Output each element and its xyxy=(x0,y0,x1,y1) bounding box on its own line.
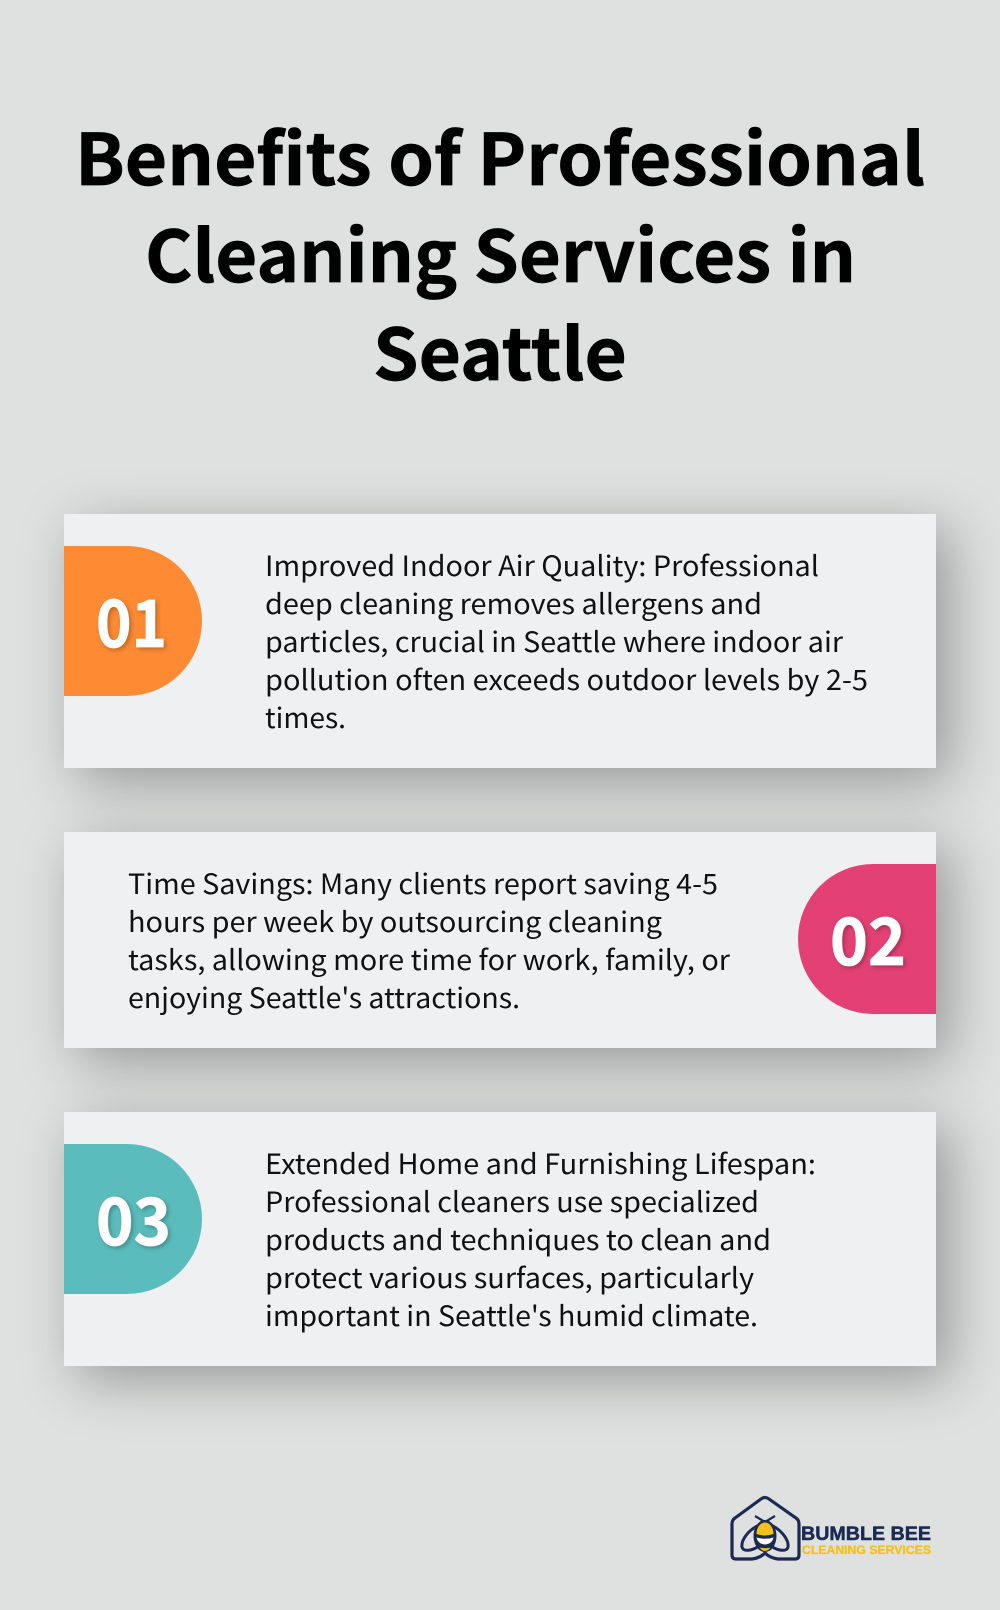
card background 3 xyxy=(64,1112,936,1366)
title: Benefits of Professional xyxy=(75,104,925,206)
text block 2: Time Savings: Many clients report saving 4-5 xyxy=(128,863,718,903)
text block 2: enjoying Seattle's attractions. xyxy=(128,977,520,1017)
number badge 02 xyxy=(798,864,936,1014)
text block 3: products and techniques to clean and xyxy=(265,1219,771,1259)
panel: time savings xyxy=(64,832,936,1048)
title: Cleaning Services in xyxy=(145,201,856,303)
icon: house with bee xyxy=(732,1498,799,1559)
logo: Bumble Bee Cleaning Services xyxy=(732,1498,931,1559)
number badge 03 xyxy=(64,1144,202,1294)
text block 1: times. xyxy=(265,697,346,737)
number 01: 01 xyxy=(96,572,167,666)
text block 2 xyxy=(128,863,730,1017)
logo tagline: CLEANING SERVICES xyxy=(802,1543,931,1557)
title: Seattle xyxy=(373,299,627,401)
text block 2: hours per week by outsourcing cleaning xyxy=(128,901,662,941)
text block 1: deep cleaning removes allergens and xyxy=(265,583,762,623)
logo wordmark: BUMBLE BEE xyxy=(801,1524,931,1545)
text block 2: tasks, allowing more time for work, family, or xyxy=(128,939,730,979)
panel: improved indoor air quality xyxy=(64,514,936,768)
text block 1: particles, crucial in Seattle where indoor air xyxy=(265,621,843,661)
number 02: 02 xyxy=(830,890,906,984)
text block 1: Improved Indoor Air Quality: Professional xyxy=(265,545,819,585)
card background 2 xyxy=(64,832,936,1048)
text block 3: Professional cleaners use specialized xyxy=(265,1181,759,1221)
text block 1 xyxy=(265,545,868,737)
text block 1: pollution often exceeds outdoor levels by 2-5 xyxy=(265,659,868,699)
title xyxy=(75,104,925,401)
number 03: 03 xyxy=(96,1170,171,1264)
card background 1 xyxy=(64,514,936,768)
panel: extended lifespan xyxy=(64,1112,936,1366)
number badge 01 xyxy=(64,546,202,696)
text block 3: Extended Home and Furnishing Lifespan: xyxy=(265,1143,816,1183)
text block 3: important in Seattle's humid climate. xyxy=(265,1295,758,1335)
text block 3: protect various surfaces, particularly xyxy=(265,1257,754,1297)
text block 3 xyxy=(265,1143,816,1335)
